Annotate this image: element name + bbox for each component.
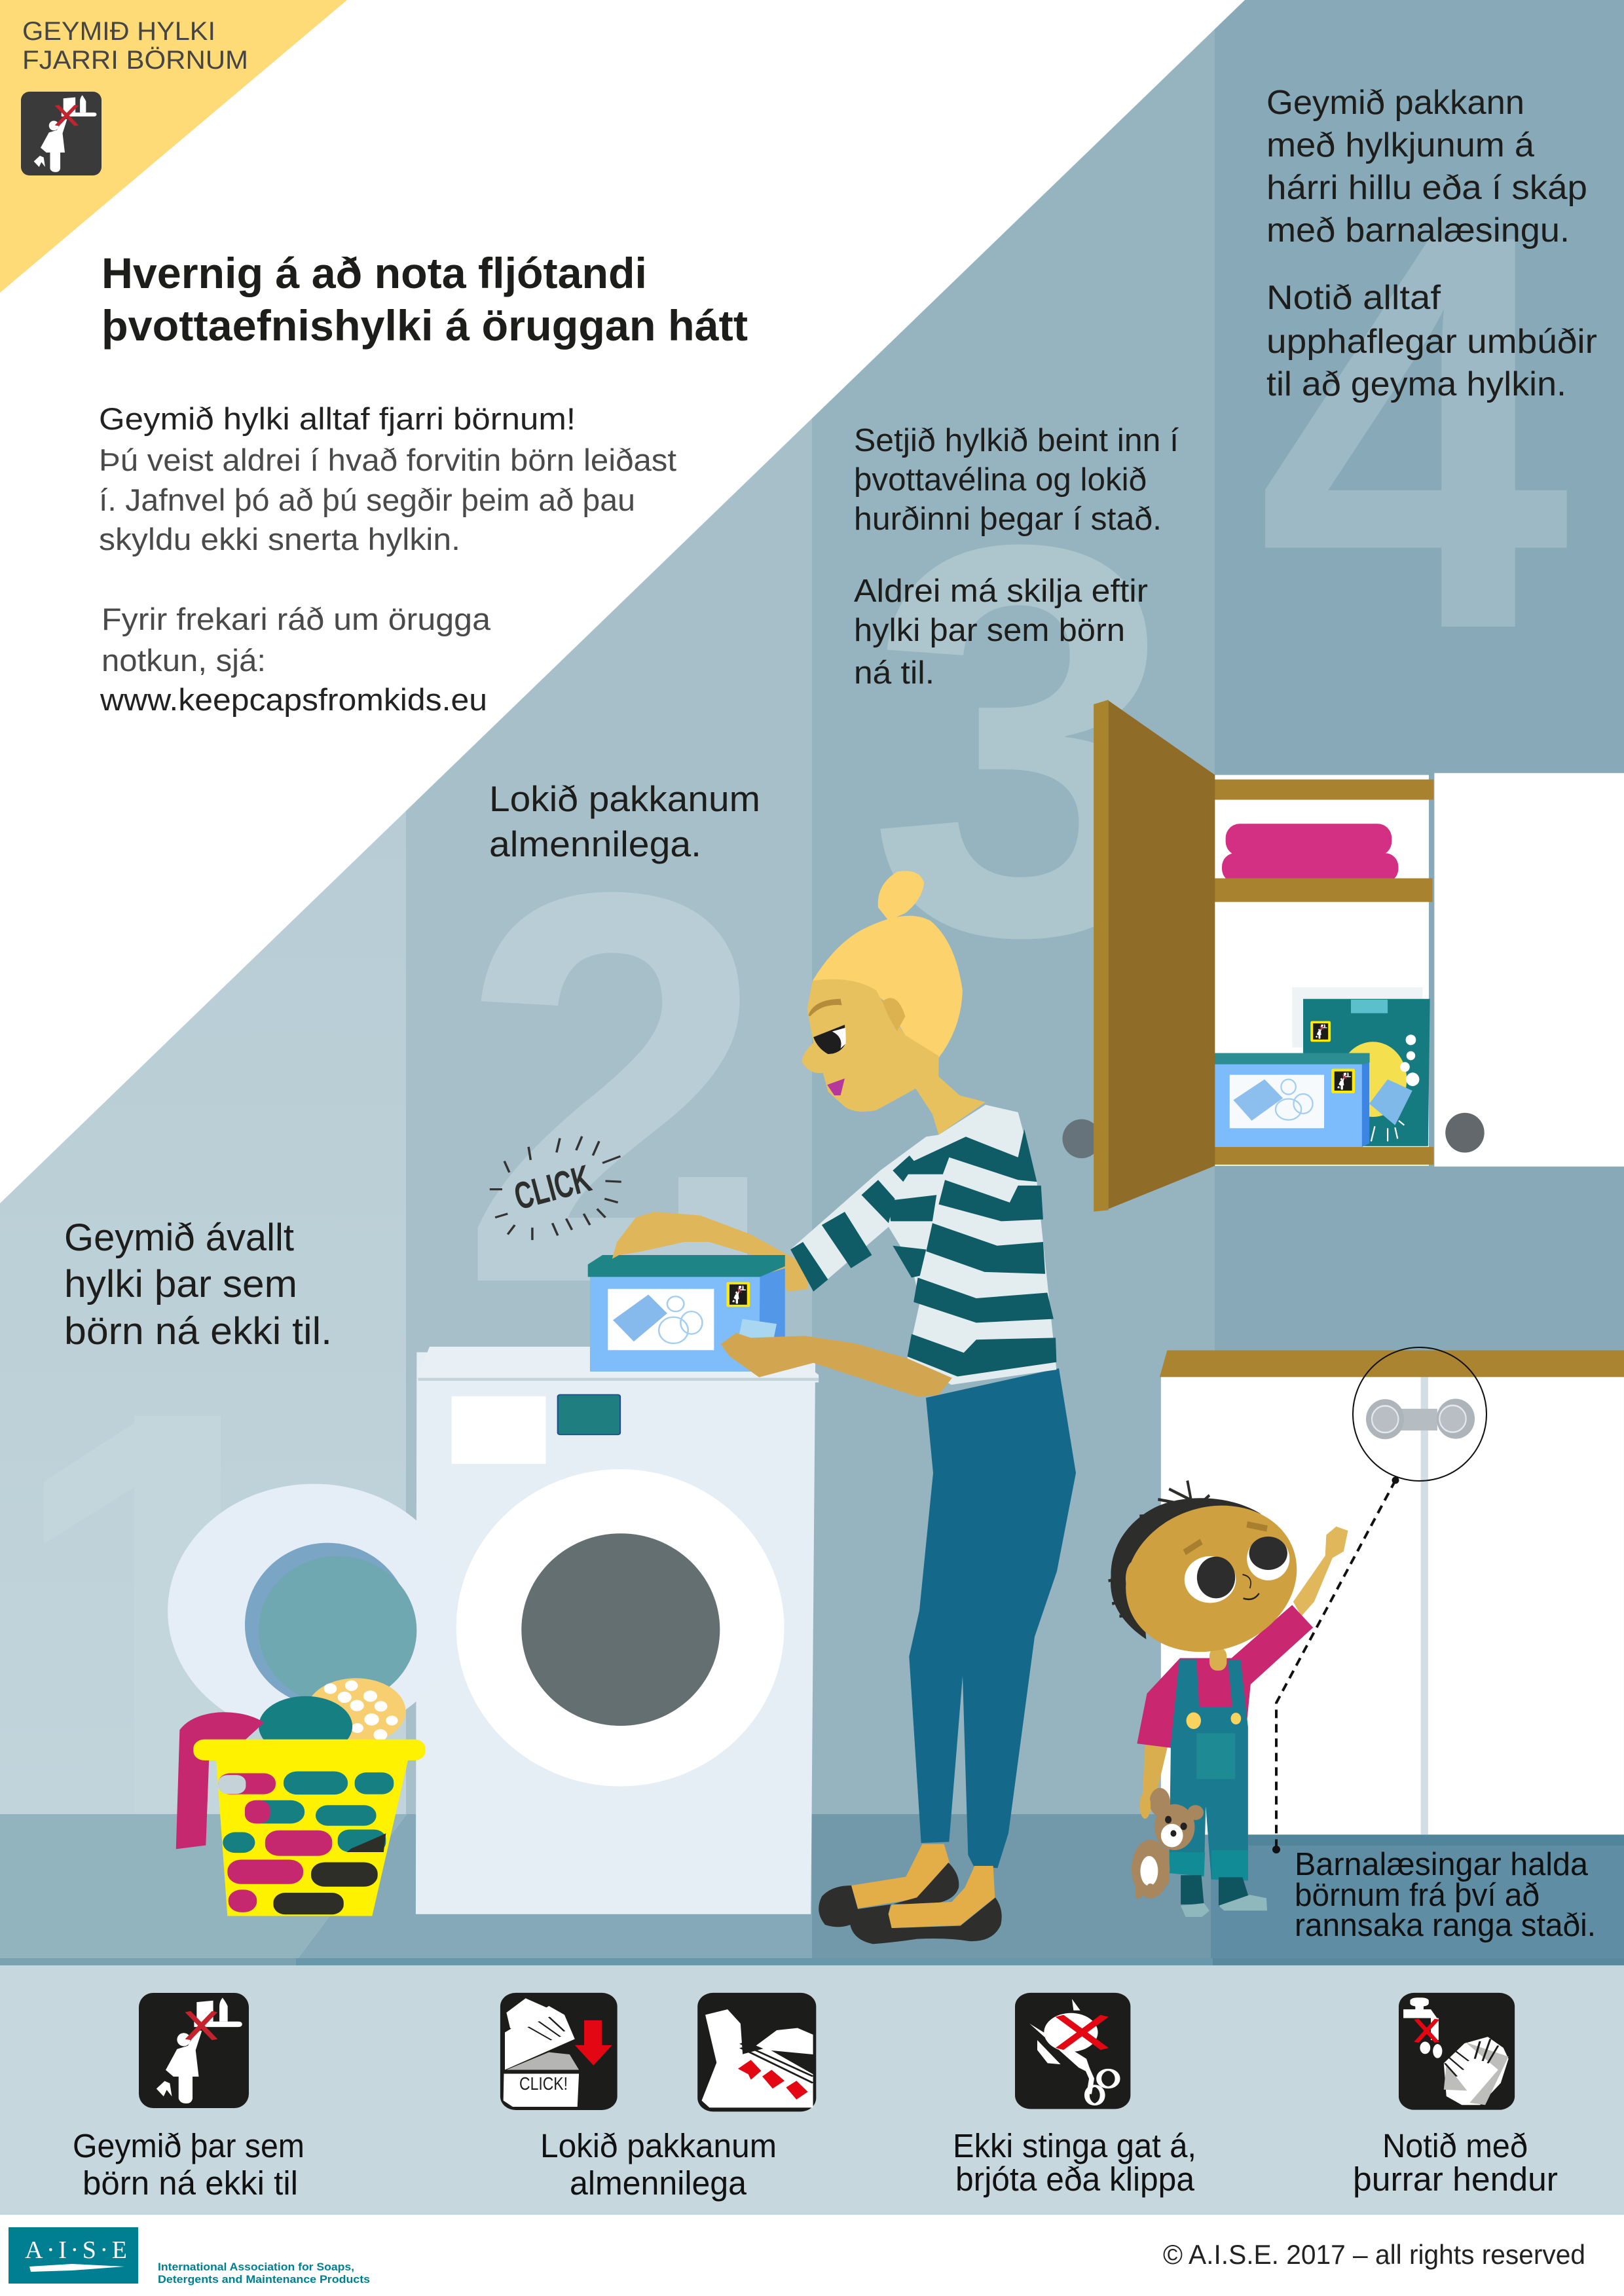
click mark [490,1137,621,1240]
corner heading: GEYMIÐ HYLKI [22,17,215,46]
AISE logo: A·I·S·E [25,2236,127,2264]
intro text: skyldu ekki snerta hylkin. [99,522,460,556]
intro text [99,401,676,717]
yellow corner [0,0,347,293]
child lock [1366,1398,1475,1439]
laundry basket [193,1740,426,1916]
caption: close pack [540,2127,777,2202]
raised arm [1293,1527,1348,1616]
step 4 text: upphaflegar umbúðir [1266,323,1597,361]
laundry in basket [176,1678,405,1849]
cabinet interior [1214,775,1429,1166]
step 4 text: með barnalæsingu. [1266,211,1570,249]
child lock caption: börnum frá því að [1295,1878,1540,1913]
step 2 text [489,778,760,864]
green capsule pouch [1292,987,1430,1146]
step 1 text: Geymið ávallt [64,1216,294,1259]
step 4 text: Geymið pakkann [1266,84,1524,122]
icon: no puncture or cut [1015,1993,1130,2109]
detergent box on machine [588,1255,785,1372]
step 3 text: hylki þar sem börn [854,613,1125,648]
zoom circle and dashed pointer [1273,1347,1486,1853]
caption: dry hands: Notið með [1382,2127,1528,2164]
caption: close pack: almennilega [570,2164,747,2202]
neck [1209,1648,1227,1671]
machine body [416,1353,815,1914]
caption: no puncture or cut [953,2127,1196,2198]
cuffs [1169,1850,1248,1881]
shelves [1214,780,1433,1165]
ear [1126,1560,1146,1597]
eyebrow [808,999,842,1017]
control panel [452,1396,545,1464]
pocket [1196,1733,1235,1779]
icon: keep away from children [21,92,101,175]
child lock caption [1295,1847,1596,1943]
upper cabinet [1062,700,1624,1212]
step 2 text: almennilega. [489,824,701,864]
intro text: Fyrir frekari ráð um örugga [101,602,491,636]
caption: store out of reach: Geymið þar sem [73,2127,304,2164]
step 4 text [1266,84,1597,403]
icon: store out of reach [139,1993,249,2108]
large numeral 4: 4 [1257,117,1574,746]
child lock caption: rannsaka ranga staði. [1295,1908,1596,1943]
step 3 text [854,423,1179,691]
neck [901,1032,986,1135]
intro text: notkun, sjá: [101,643,266,678]
child lock caption: Barnalæsingar halda [1295,1847,1589,1882]
child [1109,1480,1348,1917]
intro text: Þú veist aldrei í hvað forvitin börn leiðast [99,443,676,477]
hair [813,916,963,1058]
white top diagonal area [0,0,1245,1203]
large numeral 2: 2 [458,778,768,1399]
lips [827,1078,845,1095]
caption: no puncture or cut: Ekki stinga gat á, [953,2127,1196,2164]
step 3 text: Aldrei má skilja eftir [854,574,1148,609]
hand on lid [612,1212,713,1259]
lower cabinet [1160,1351,1624,1846]
copyright: © A.I.S.E. 2017 – all rights reserved [1163,2239,1585,2270]
detergent drawer [558,1394,620,1434]
floor shadow under cabinet [1248,1834,1624,1846]
step 4 text: með hylkjunum á [1266,126,1534,164]
title: þvottaefnishylki á öruggan hátt [101,301,748,350]
AISE organisation name [158,2261,370,2286]
step 4 text: til að geyma hylkin. [1266,365,1566,403]
intro text: www.keepcapsfromkids.eu [100,682,487,717]
brows and mouth [1185,1524,1267,1599]
step 3 text: ná til. [854,655,934,691]
step 1 text [64,1216,332,1353]
title [101,249,748,350]
pink towels [1222,824,1398,883]
caption: dry hands: þurrar hendur [1353,2160,1558,2198]
far knob [1062,1119,1101,1158]
caption: dry hands [1353,2127,1558,2198]
eyes [1185,1537,1289,1603]
countertop [1160,1351,1624,1377]
icon: close pack [500,1993,618,2110]
caption: store out of reach: börn ná ekki til [83,2164,298,2202]
left arm [1141,1743,1168,1815]
open door [168,1484,460,1738]
ear [882,998,905,1032]
closed cabinet door [1434,773,1624,1167]
shoes [1181,1875,1267,1917]
cabinet doors [1161,1376,1624,1834]
step 1 text: hylki þar sem [64,1263,297,1305]
front door [456,1469,784,1787]
hand holding teddy [1139,1792,1151,1819]
eye [813,1025,846,1054]
step 1 text: börn ná ekki til. [64,1310,332,1353]
hair bun [878,871,924,920]
washing machine [168,1347,819,1916]
safety pictogram panel [0,1965,1624,2215]
step 3 text: Setjið hylkið beint inn í [854,423,1179,458]
step 4 text: Notið alltaf [1266,279,1441,317]
caption: close pack: Lokið pakkanum [540,2127,777,2164]
icon: dry hands [1399,1993,1515,2110]
corner heading: FJARRI BÖRNUM [22,46,248,75]
door knob [1445,1113,1485,1153]
icon: seal pack [697,1993,816,2111]
caption: no puncture or cut: brjóta eða klippa [955,2160,1195,2198]
lower forearm and hand [721,1333,952,1396]
buttons [1187,1712,1241,1729]
step 2 text: Lokið pakkanum [489,778,760,819]
face [802,979,938,1112]
head [1114,1488,1309,1669]
legs and shoes [819,1368,1076,1944]
title: Hvernig á að nota fljótandi [101,249,647,297]
intro text: í. Jafnvel þó að þú segðir þeim að þau [99,483,635,517]
intro text: Geymið hylki alltaf fjarri börnum! [99,401,576,436]
hair [1109,1480,1261,1639]
hand over capsule [721,1333,818,1377]
AISE organisation name: Detergents and Maintenance Products [158,2273,370,2286]
upper forearm and hand [612,1212,808,1292]
floor [0,1814,1624,1965]
step 3 text: þvottavélina og lokið [854,462,1147,498]
blue capsule box [1213,1053,1370,1147]
open cabinet door [1094,700,1215,1212]
shirt [1137,1605,1313,1748]
icon: close pack: CLICK! [519,2073,568,2094]
AISE organisation name: International Association for Soaps, [158,2261,354,2273]
AISE logo [9,2227,138,2284]
woman [588,871,1076,1944]
large numeral 1: 1 [5,1292,325,1936]
click mark: CLICK [510,1157,595,1218]
corner heading [22,17,248,75]
step 4 text: hárri hillu eða í skáp [1266,169,1587,207]
step 3 text: hurðinni þegar í stað. [854,501,1162,537]
background walls [0,0,1624,1814]
overalls [1169,1659,1248,1881]
striped shirt [790,1104,1056,1385]
caption: store out of reach [73,2127,304,2202]
machine top [418,1347,819,1382]
teddy bear [1132,1788,1204,1899]
large numeral 3: 3 [868,430,1177,1051]
